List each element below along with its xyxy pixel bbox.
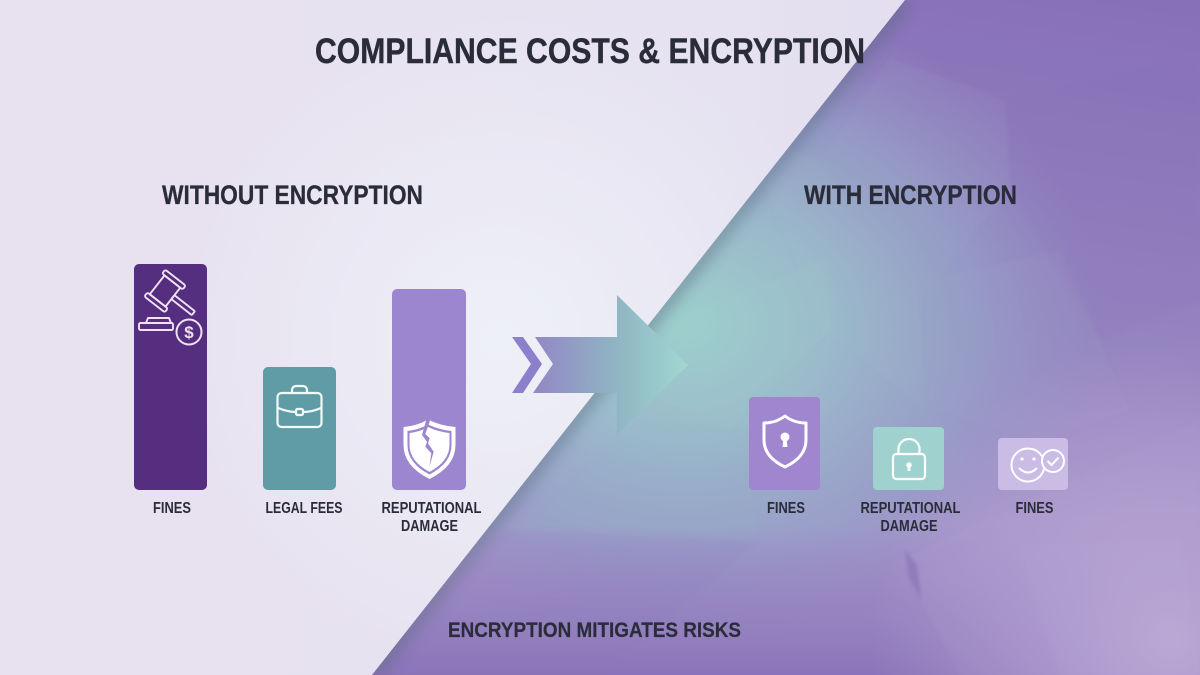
title: COMPLIANCE COSTS & ENCRYPTION [315,32,865,71]
label: reputational damage: REPUTATIONAL [860,500,961,517]
label: legal fees: LEGAL FEES [266,500,343,517]
arrow: transition from without to with encryption [512,295,688,435]
icon: shield with keyhole [764,416,806,467]
label: reputational damage: DAMAGE [880,518,938,535]
label: fines: FINES [767,500,805,517]
icon: smiley with check badge [1012,448,1064,482]
decorative dark streak [906,553,920,595]
icon: cracked shield [404,417,456,479]
icon: padlock [893,439,925,479]
tile: fines with encryption [749,397,820,490]
tile: fines smiley [998,438,1068,490]
footer message: ENCRYPTION MITIGATES RISKS [448,619,741,642]
bar: fines without encryption [134,264,207,490]
bar: legal fees [263,367,336,490]
heading: with encryption: WITH ENCRYPTION [804,180,1017,210]
label: reputational damage [382,500,482,535]
inner shadow along diagonal [372,0,905,675]
label: reputational damage [860,500,961,535]
icon: gavel and dollar coin [139,270,204,344]
label: fines smiley: FINES [1016,500,1054,517]
bar: reputational damage [392,289,466,490]
label: reputational damage: REPUTATIONAL [382,500,482,517]
tile: reputational damage with encryption [873,427,944,490]
label: reputational damage: DAMAGE [401,518,458,535]
label: fines: FINES [153,500,191,517]
heading: without encryption: WITHOUT ENCRYPTION [162,180,423,210]
icon: dollar sign: $ [184,323,194,342]
icon: briefcase [278,386,322,427]
